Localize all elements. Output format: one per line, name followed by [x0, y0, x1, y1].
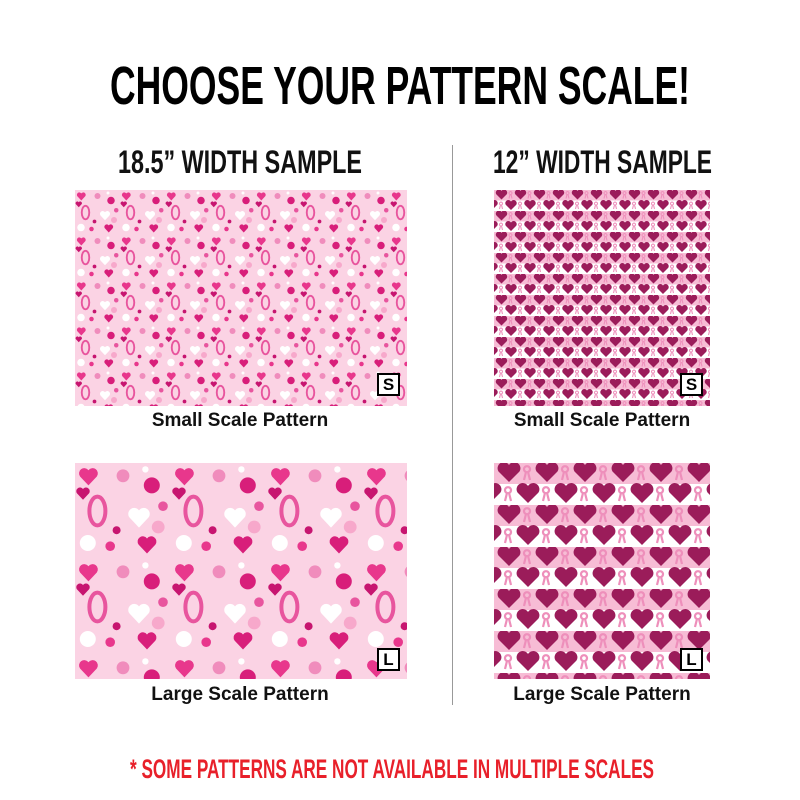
badge S: S — [383, 375, 394, 394]
badge S right — [680, 373, 703, 396]
panel: left small — [75, 190, 407, 406]
panel: right large — [494, 463, 710, 679]
label: left small: Small Scale Pattern — [152, 410, 328, 431]
divider — [452, 145, 453, 705]
label: right large: Large Scale Pattern — [513, 684, 691, 705]
label: right small: Small Scale Pattern — [514, 410, 690, 431]
label: left large: Large Scale Pattern — [151, 684, 329, 705]
badge L: L — [383, 650, 394, 669]
panel: left large — [75, 463, 407, 679]
badge S — [377, 373, 400, 396]
badge L right — [680, 648, 703, 671]
badge S right: S — [686, 375, 697, 394]
badge L right: L — [686, 650, 697, 669]
badge L — [377, 648, 400, 671]
panel: right small — [494, 190, 710, 406]
